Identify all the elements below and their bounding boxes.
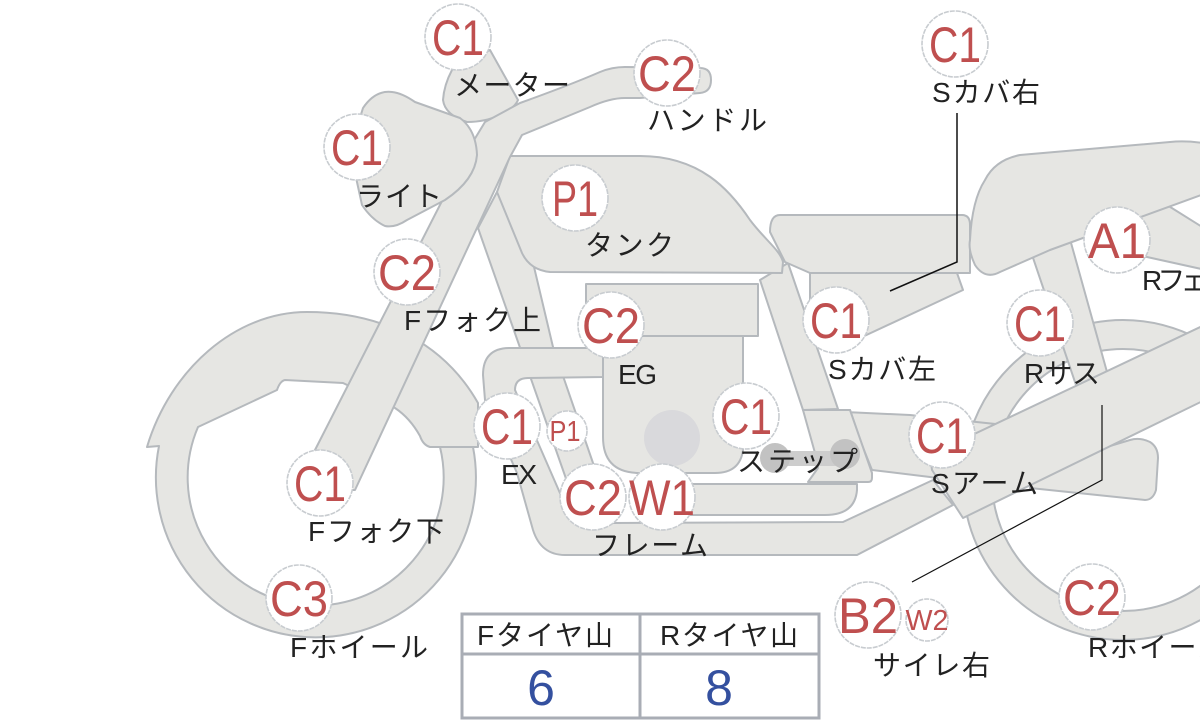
header: front tire tread: Fタイヤ山 bbox=[477, 620, 613, 651]
side cover bbox=[810, 273, 963, 338]
label: muffler right: サイレ右 bbox=[873, 650, 990, 681]
header: rear tire tread: Rタイヤ山 bbox=[660, 620, 798, 651]
badge: frame C2: C2 bbox=[564, 470, 622, 526]
value: rear tread: 8 bbox=[705, 660, 733, 716]
badge: swing arm C1: C1 bbox=[916, 408, 968, 464]
muffler bbox=[1030, 439, 1158, 500]
front wheel and fender bbox=[147, 312, 478, 637]
badge: left side cover C1: C1 bbox=[810, 293, 862, 349]
badge: frame W1: W1 bbox=[629, 470, 695, 526]
badge: right side cover C1: C1 bbox=[929, 17, 981, 73]
label: exhaust: EX bbox=[501, 459, 537, 490]
badge: upper fork C2: C2 bbox=[378, 245, 436, 301]
tire tread table bbox=[462, 614, 819, 718]
badge: light C1: C1 bbox=[331, 120, 383, 176]
meter bbox=[443, 50, 518, 122]
label: tank: タンク bbox=[585, 230, 674, 261]
motorcycle silhouette bbox=[147, 50, 1200, 640]
label: upper fork: Fフォク上 bbox=[404, 305, 541, 336]
badge: lower fork C1: C1 bbox=[294, 456, 346, 512]
engine block bbox=[603, 336, 743, 473]
label: engine: EG bbox=[618, 359, 657, 390]
frame down tube bbox=[478, 192, 610, 490]
swing arm bbox=[930, 320, 1200, 518]
swing arm mount bbox=[803, 410, 1005, 490]
callout line: right muffler bbox=[912, 405, 1102, 582]
step bar and pegs bbox=[760, 439, 860, 473]
exhaust and lower frame bbox=[483, 348, 953, 555]
engine head bbox=[586, 284, 758, 336]
rear wheel bbox=[963, 320, 1200, 640]
fuel tank bbox=[497, 156, 783, 273]
badge: meter C1: C1 bbox=[432, 10, 484, 66]
rear suspension bbox=[1027, 232, 1107, 388]
badge: muffler W2: W2 bbox=[906, 605, 948, 637]
badge: rear suspension C1: C1 bbox=[1014, 296, 1066, 352]
badge: engine C2: C2 bbox=[582, 298, 640, 354]
badge: exhaust P1: P1 bbox=[550, 416, 580, 448]
label: lower fork: Fフォク下 bbox=[308, 516, 444, 547]
badge: muffler B2: B2 bbox=[838, 588, 898, 644]
fork and handlebar bbox=[315, 67, 711, 490]
badge: rear fender A1: A1 bbox=[1088, 213, 1146, 269]
label: light: ライト bbox=[356, 181, 442, 212]
callout line: right side cover bbox=[890, 113, 957, 291]
part labels bbox=[290, 70, 1200, 681]
badge: tank P1 bbox=[542, 165, 608, 231]
label: step: ステップ bbox=[737, 446, 858, 477]
label: rear suspension: Rサス bbox=[1024, 358, 1100, 389]
badge: front wheel C3: C3 bbox=[270, 571, 328, 627]
badge: exhaust C1: C1 bbox=[481, 399, 533, 455]
label: swing arm: Sアーム bbox=[931, 468, 1038, 499]
frame rear tube bbox=[760, 263, 838, 410]
label: front wheel: Fホイール bbox=[290, 632, 428, 663]
rear fender bbox=[1100, 205, 1200, 272]
badge: handle C2: C2 bbox=[638, 46, 696, 102]
badge: step C1: C1 bbox=[720, 389, 772, 445]
badge: tank P1: P1 bbox=[552, 171, 598, 227]
seat bbox=[970, 141, 1200, 275]
label: frame: フレーム bbox=[592, 530, 708, 561]
headlight bbox=[350, 92, 477, 226]
seat base bbox=[770, 215, 970, 273]
value: front tread: 6 bbox=[527, 660, 555, 716]
step mount block bbox=[803, 410, 872, 482]
lower rounded box bbox=[680, 484, 857, 515]
label: meter: メーター bbox=[454, 70, 570, 101]
label: left side cover: Sカバ左 bbox=[828, 354, 936, 385]
label: right side cover: Sカバ右 bbox=[932, 77, 1040, 108]
engine crank circle bbox=[644, 410, 700, 466]
badge: rear wheel C2: C2 bbox=[1063, 570, 1121, 626]
label: handle: ハンドル bbox=[647, 105, 767, 136]
table frame bbox=[462, 614, 819, 718]
